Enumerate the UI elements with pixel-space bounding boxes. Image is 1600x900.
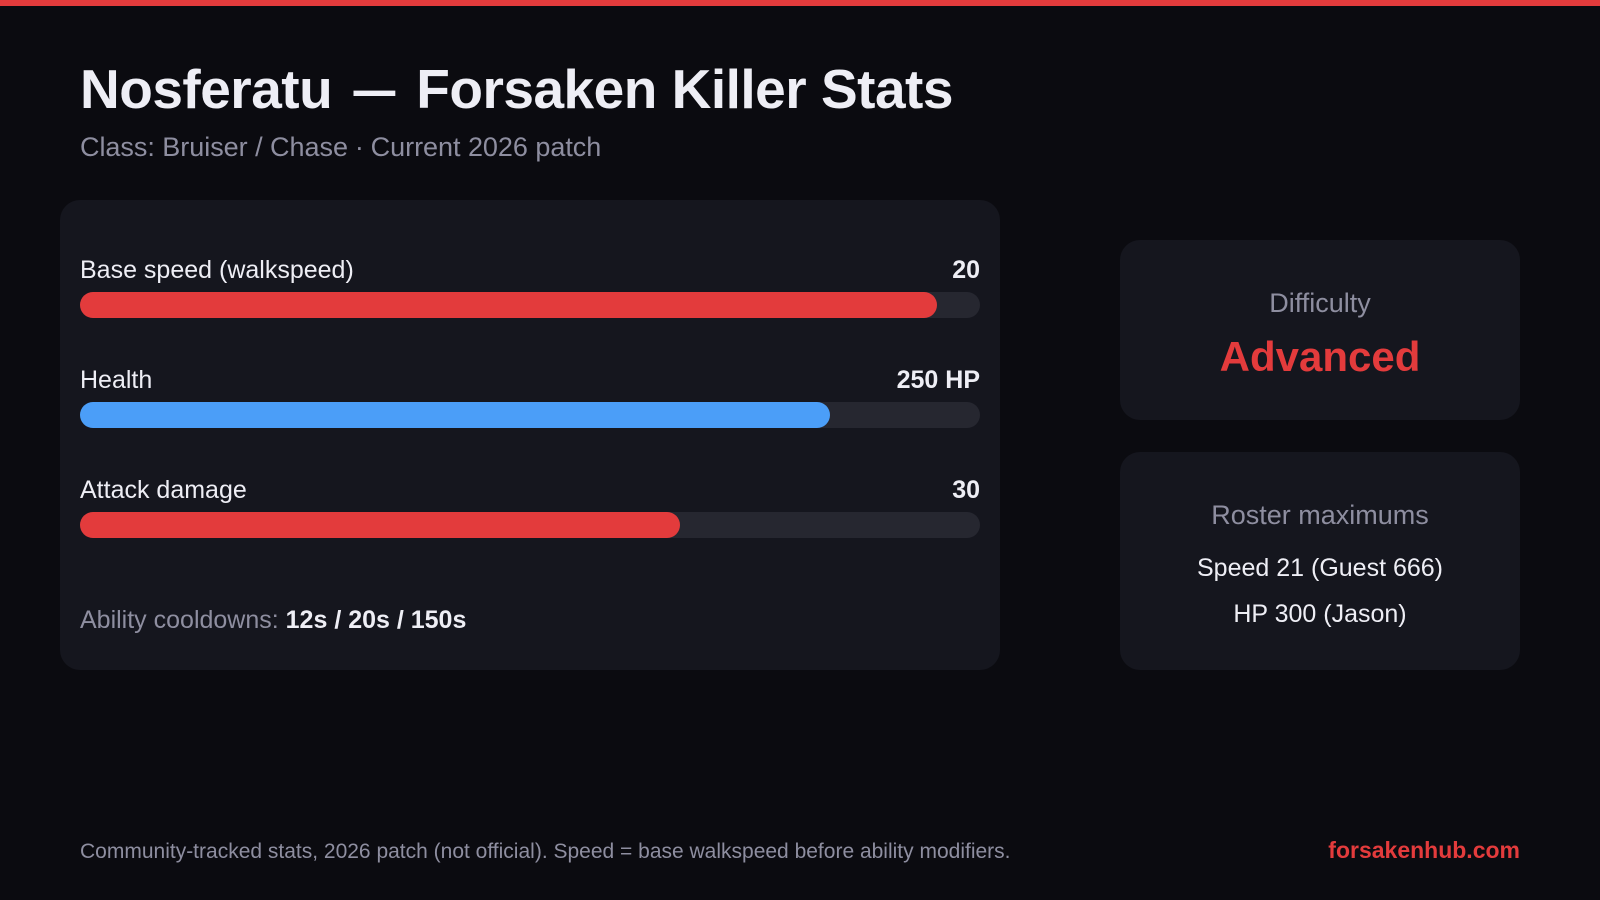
site credit: forsakenhub.com [1328,837,1520,863]
title: — [354,58,395,120]
footer note: Community-tracked stats, 2026 patch (not official). Speed = base walkspeed before ability modifiers. [80,840,1011,863]
panel: roster maximums [1120,452,1520,670]
stat value: health: 250 HP [897,366,980,394]
roster heading: Roster maximums [1211,500,1429,530]
top accent bar [0,0,1600,6]
stat label: base speed: Base speed (walkspeed) [80,256,354,284]
panel: difficulty [1120,240,1520,420]
difficulty label: Difficulty [1269,288,1371,318]
stat label: attack damage: Attack damage [80,476,247,504]
subtitle: Class: Bruiser / Chase · Current 2026 patch [80,132,601,162]
difficulty value: Advanced [1220,333,1420,380]
stat value: base speed: 20 [952,256,980,284]
ability cooldowns: Ability cooldowns: 12s / 20s / 150s [80,606,466,634]
title: Nosferatu Forsaken Killer Stats [80,58,953,120]
roster HP maximum: HP 300 (Jason) [1233,600,1407,628]
stat value: attack damage: 30 [952,476,980,504]
bar: attack damage [80,512,980,538]
panel: stat bars [60,200,1000,670]
bar: base speed [80,292,980,318]
stat label: health: Health [80,366,152,394]
bar: health [80,402,980,428]
roster speed maximum: Speed 21 (Guest 666) [1197,554,1443,582]
